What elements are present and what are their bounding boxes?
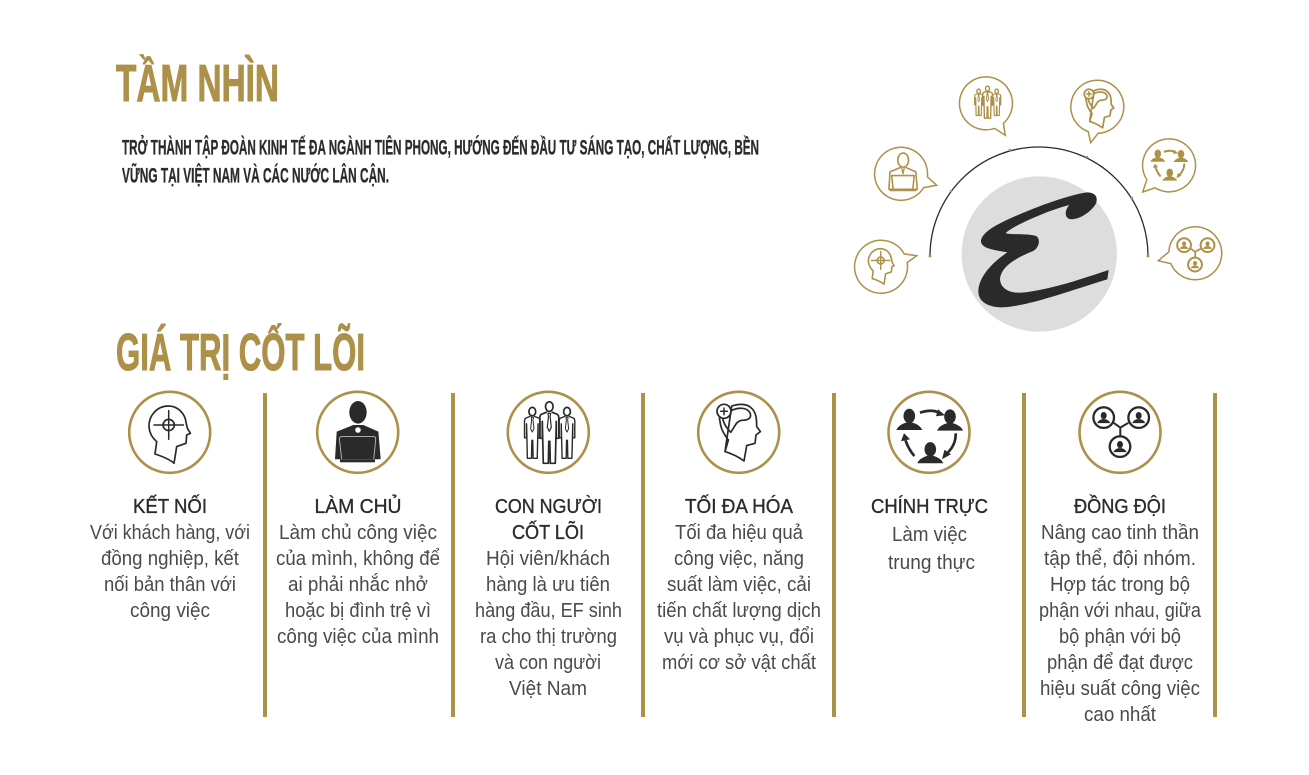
description: mới cơ sở vật chất xyxy=(662,652,816,674)
description xyxy=(90,522,250,622)
description xyxy=(888,524,975,574)
description: hàng đầu, EF sinh xyxy=(475,600,622,622)
panel: Đồng đội xyxy=(1039,392,1202,726)
vision statement text: TRỞ THÀNH TẬP ĐOÀN KINH TẾ ĐA NGÀNH TIÊN PHONG, HƯỚNG ĐẾN ĐẦU TƯ SÁNG TẠO, CHẤT LƯỢNG, BỀN xyxy=(122,136,759,160)
heading: LÀM CHỦ xyxy=(314,494,402,518)
description: nối bản thân với xyxy=(104,574,236,596)
description: Với khách hàng, với xyxy=(90,522,250,544)
description: tập thể, đội nhóm. xyxy=(1044,548,1196,570)
description xyxy=(657,522,821,674)
description: cao nhất xyxy=(1084,704,1156,726)
description: đồng nghiệp, kết xyxy=(101,548,239,570)
description: tiến chất lượng dịch xyxy=(657,600,821,622)
panel: Con người cốt lõi xyxy=(475,392,622,700)
description: phận để đạt được xyxy=(1047,652,1193,674)
icon: head with target xyxy=(129,392,210,473)
speech bubble: people cycle xyxy=(1143,139,1196,192)
speech bubble: person with laptop xyxy=(875,147,937,200)
description: phận với nhau, giữa xyxy=(1039,600,1202,622)
panel: Chính trực xyxy=(871,392,988,574)
speech bubble: head with plus xyxy=(1071,80,1124,143)
description: công việc của mình xyxy=(277,626,439,648)
description: và con người xyxy=(495,652,601,674)
description: Việt Nam xyxy=(509,678,587,700)
description: hiệu suất công việc xyxy=(1040,678,1200,700)
description: công việc xyxy=(130,600,210,622)
icon: people cycle xyxy=(888,392,970,473)
speech bubble: target head xyxy=(855,240,917,293)
description xyxy=(1039,522,1202,726)
description xyxy=(475,548,622,700)
heading: CHÍNH TRỰC xyxy=(871,495,988,518)
title: Giá trị cốt lõi: GIÁ TRỊ CỐT LÕI xyxy=(116,323,365,382)
E logo mark xyxy=(978,192,1109,307)
vision statement text: VỮNG TẠI VIỆT NAM VÀ CÁC NƯỚC LÂN CẬN. xyxy=(122,164,389,188)
description: trung thực xyxy=(888,552,975,574)
logo diagram: E emblem with arc and speech bubbles xyxy=(855,77,1222,332)
description: Làm chủ công việc xyxy=(279,522,437,544)
title: Tầm nhìn: TẦM NHÌN xyxy=(116,54,279,113)
description: Làm việc xyxy=(892,524,967,546)
description: suất làm việc, cải xyxy=(667,574,811,596)
heading: CON NGƯỜI xyxy=(495,495,602,518)
panel: Làm chủ xyxy=(276,392,440,648)
description: Nâng cao tinh thần xyxy=(1041,522,1199,544)
description: Tối đa hiệu quả xyxy=(675,522,804,544)
heading: TỐI ĐA HÓA xyxy=(685,494,794,518)
panel: Kết nối xyxy=(90,392,250,622)
icon: team of three xyxy=(508,392,589,473)
description: bộ phận với bộ xyxy=(1059,626,1181,648)
icon: connected people xyxy=(1080,392,1160,473)
description: vụ và phục vụ, đổi xyxy=(664,626,814,648)
heading: CỐT LÕI xyxy=(512,520,584,544)
vision statement text xyxy=(122,136,759,188)
icon: head with plus xyxy=(698,392,779,473)
description: của mình, không để xyxy=(276,548,440,570)
speech bubble: network xyxy=(1158,227,1222,280)
speech bubble: team xyxy=(959,77,1012,135)
heading: KẾT NỐI xyxy=(133,494,207,518)
description: ra cho thị trường xyxy=(480,626,617,648)
heading: ĐỒNG ĐỘI xyxy=(1074,494,1166,518)
description: Hợp tác trong bộ xyxy=(1050,574,1190,596)
icon: person with laptop xyxy=(317,392,398,473)
description: hoặc bị đình trệ vì xyxy=(285,600,431,622)
heading xyxy=(495,495,602,544)
description xyxy=(276,522,440,648)
description: công việc, năng xyxy=(674,548,804,570)
description: Hội viên/khách xyxy=(486,548,610,570)
description: hàng là ưu tiên xyxy=(486,574,610,596)
description: ai phải nhắc nhở xyxy=(288,573,428,596)
panel: Tối đa hóa xyxy=(657,392,821,674)
grey emblem circle xyxy=(962,176,1117,332)
semicircle arc with dots xyxy=(928,147,1150,258)
